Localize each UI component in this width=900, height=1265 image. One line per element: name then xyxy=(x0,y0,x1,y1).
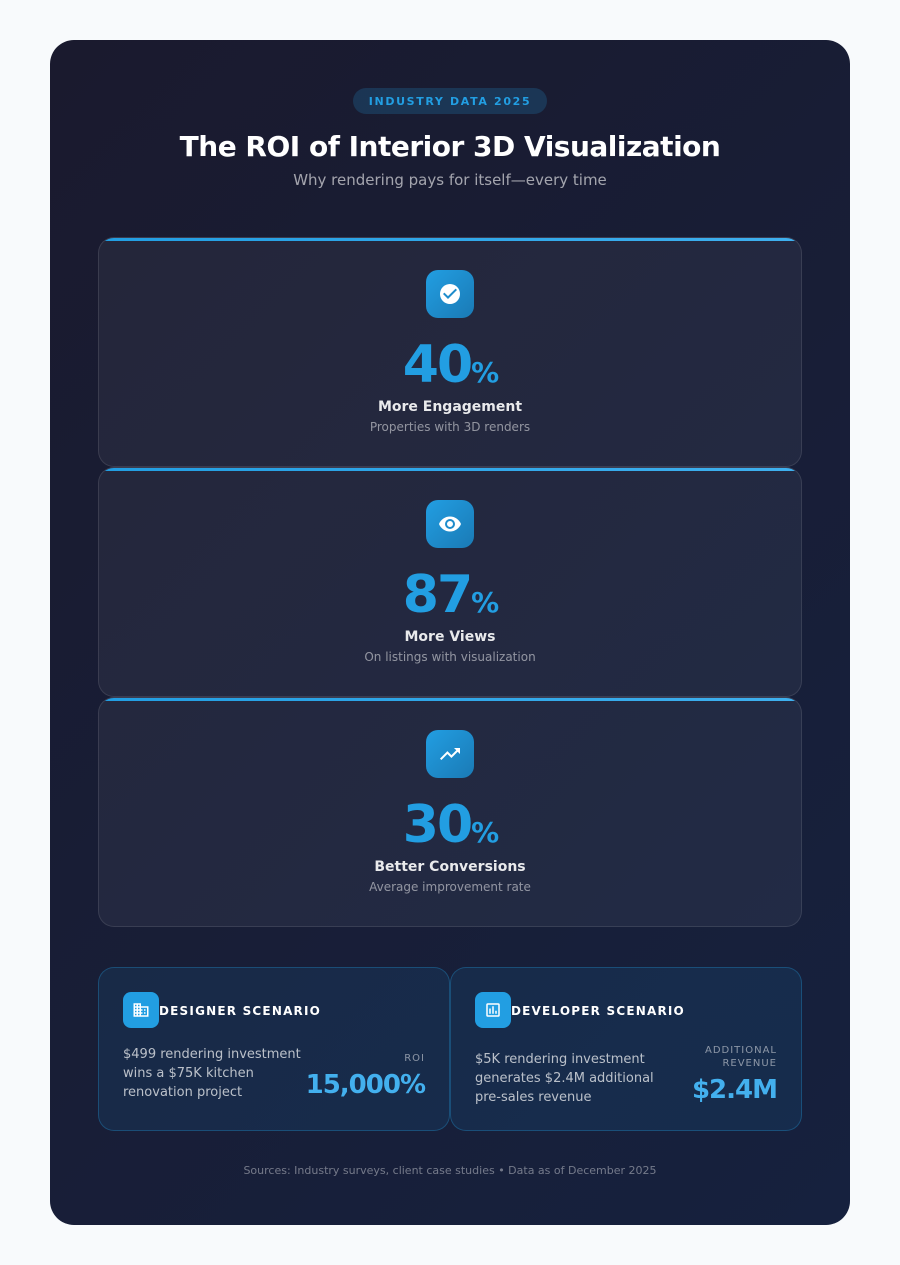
stat number: 30%: 30% xyxy=(403,795,497,855)
panel: stat 40% more engagement xyxy=(98,237,802,467)
metric label: additional revenue xyxy=(705,1045,777,1069)
panel: stat 87% more views xyxy=(98,467,802,697)
scenario description: generates $2.4M additional xyxy=(475,1071,654,1086)
stat label: better conversions: Better Conversions xyxy=(374,859,526,875)
stat label: more views: More Views xyxy=(404,629,495,645)
metric value: 15,000%: 15,000% xyxy=(306,1070,425,1100)
icon: trending up arrow xyxy=(426,730,474,778)
scenario description: pre-sales revenue xyxy=(475,1090,591,1105)
footer sources: Sources: Industry surveys, client case studies • Data as of December 2025 xyxy=(243,1164,657,1177)
stat number: 40%: 40% xyxy=(403,335,497,395)
title: The ROI of Interior 3D Visualization xyxy=(180,130,720,163)
scenario heading: DEVELOPER SCENARIO xyxy=(511,1004,685,1018)
scenario description: wins a $75K kitchen xyxy=(123,1066,254,1081)
stat caption: Average improvement rate xyxy=(369,880,531,894)
panel: developer scenario xyxy=(450,967,802,1131)
stat caption: Properties with 3D renders xyxy=(370,420,530,434)
metric label: additional revenue: REVENUE xyxy=(722,1058,777,1069)
metric value: $2.4M: $2.4M xyxy=(692,1075,777,1105)
badge: industry data 2025: INDUSTRY DATA 2025 xyxy=(369,95,531,108)
stat label: more engagement: More Engagement xyxy=(378,399,522,415)
scenario description xyxy=(475,1052,654,1105)
icon: bar chart xyxy=(475,992,511,1028)
icon: eye xyxy=(426,500,474,548)
panel: stat 30% better conversions xyxy=(98,697,802,927)
icon: building xyxy=(123,992,159,1028)
scenario description: $5K rendering investment xyxy=(475,1052,645,1067)
stat caption: On listings with visualization xyxy=(364,650,536,664)
icon: check badge xyxy=(426,270,474,318)
metric label: additional revenue: ADDITIONAL xyxy=(705,1045,777,1056)
badge: industry data 2025 xyxy=(353,88,547,114)
subtitle: Why rendering pays for itself—every time xyxy=(293,171,607,189)
stat number: 87%: 87% xyxy=(403,565,497,625)
scenario description: renovation project xyxy=(123,1085,242,1100)
metric label: ROI: ROI xyxy=(404,1053,425,1064)
scenario description: $499 rendering investment xyxy=(123,1047,301,1062)
scenario description xyxy=(123,1047,301,1100)
panel: designer scenario xyxy=(98,967,450,1131)
scenario heading: DESIGNER SCENARIO xyxy=(159,1004,321,1018)
